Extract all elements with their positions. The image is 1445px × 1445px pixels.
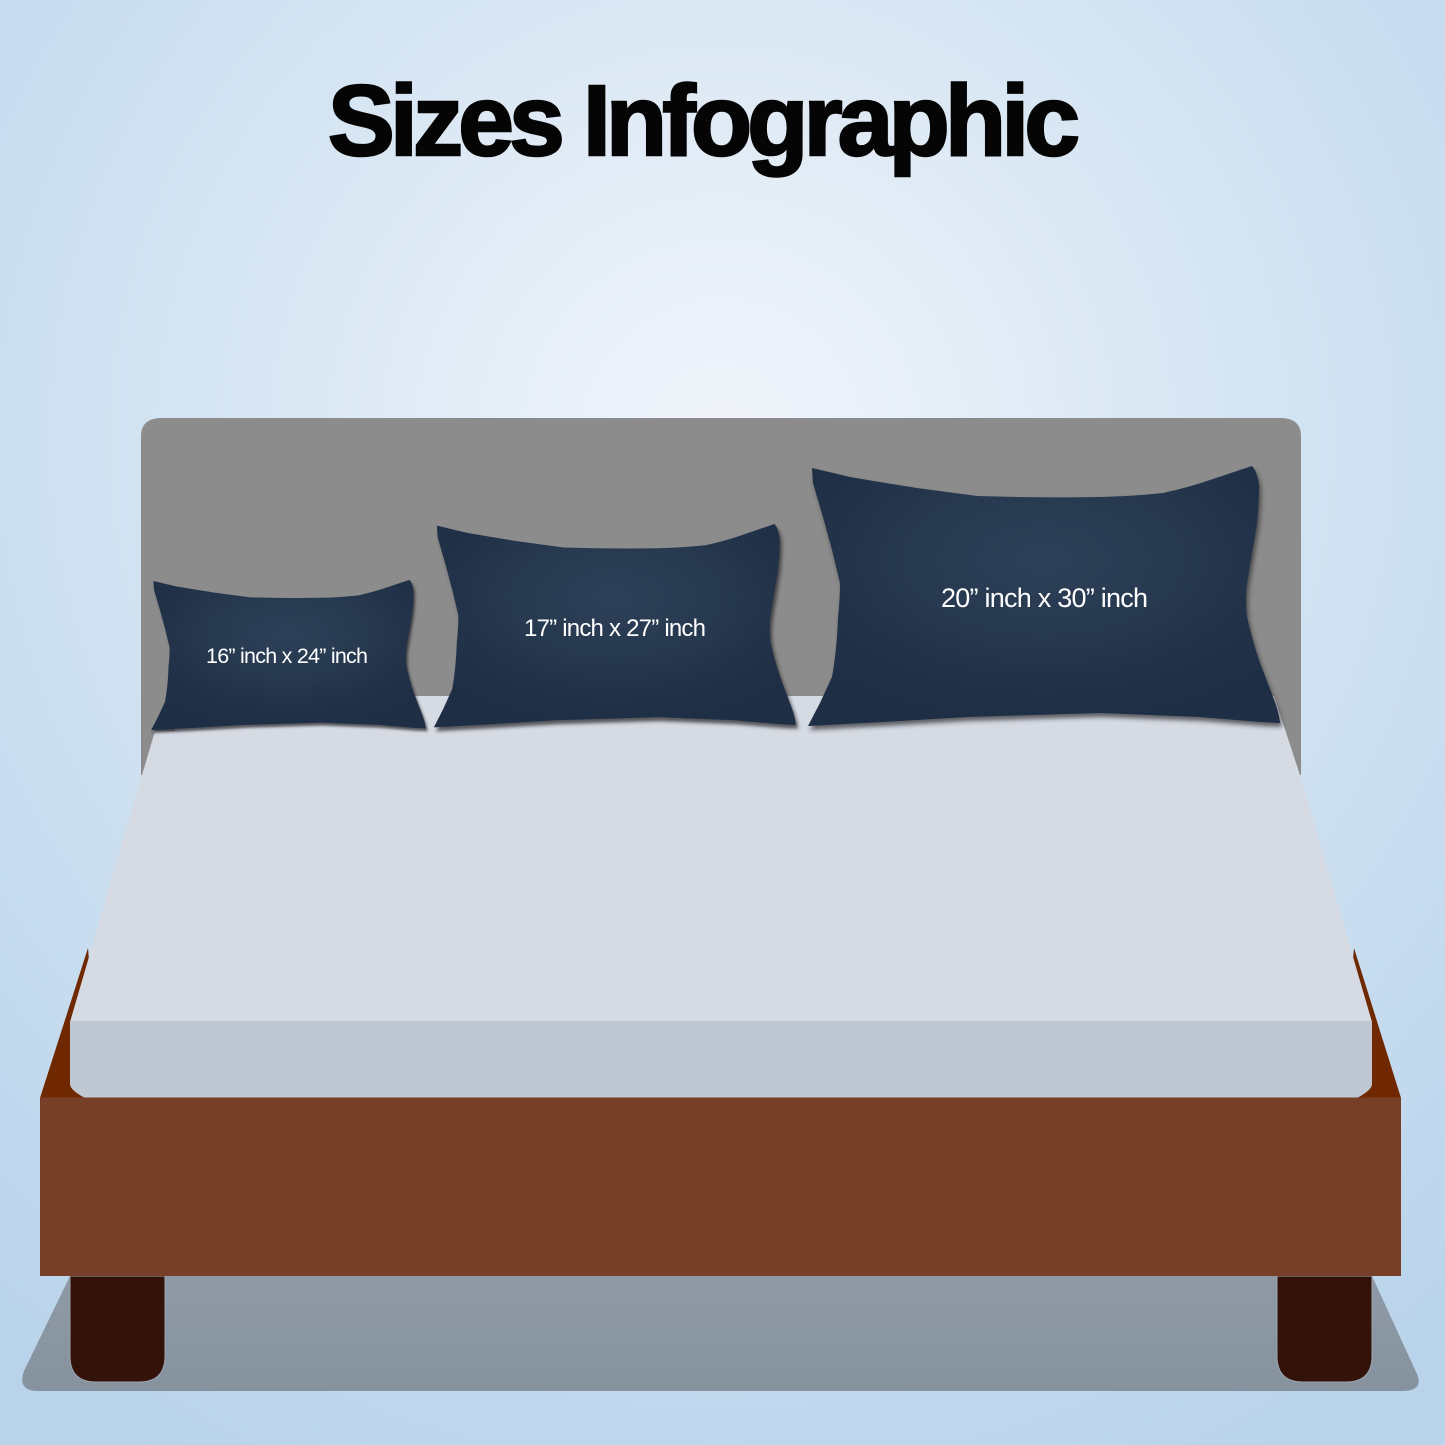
label small: 16” inch x 24” inch	[206, 644, 368, 668]
bed illustration	[22, 418, 1419, 1391]
pillow large	[808, 466, 1282, 730]
label medium: 17” inch x 27” inch	[524, 615, 706, 642]
floor shadow	[22, 1276, 1419, 1391]
mattress front side	[70, 1021, 1372, 1098]
right bed leg	[1277, 1276, 1372, 1382]
bed frame front	[40, 1098, 1401, 1276]
left bed leg	[70, 1276, 165, 1382]
back frame left side	[40, 948, 100, 1098]
pillow medium	[434, 524, 798, 731]
label large: 20” inch x 30” inch	[941, 583, 1148, 613]
pillow small	[151, 580, 428, 733]
title: Sizes Infographic	[328, 65, 1080, 177]
mattress top	[70, 696, 1372, 1022]
back frame right side	[1340, 948, 1401, 1098]
headboard	[141, 418, 1301, 775]
